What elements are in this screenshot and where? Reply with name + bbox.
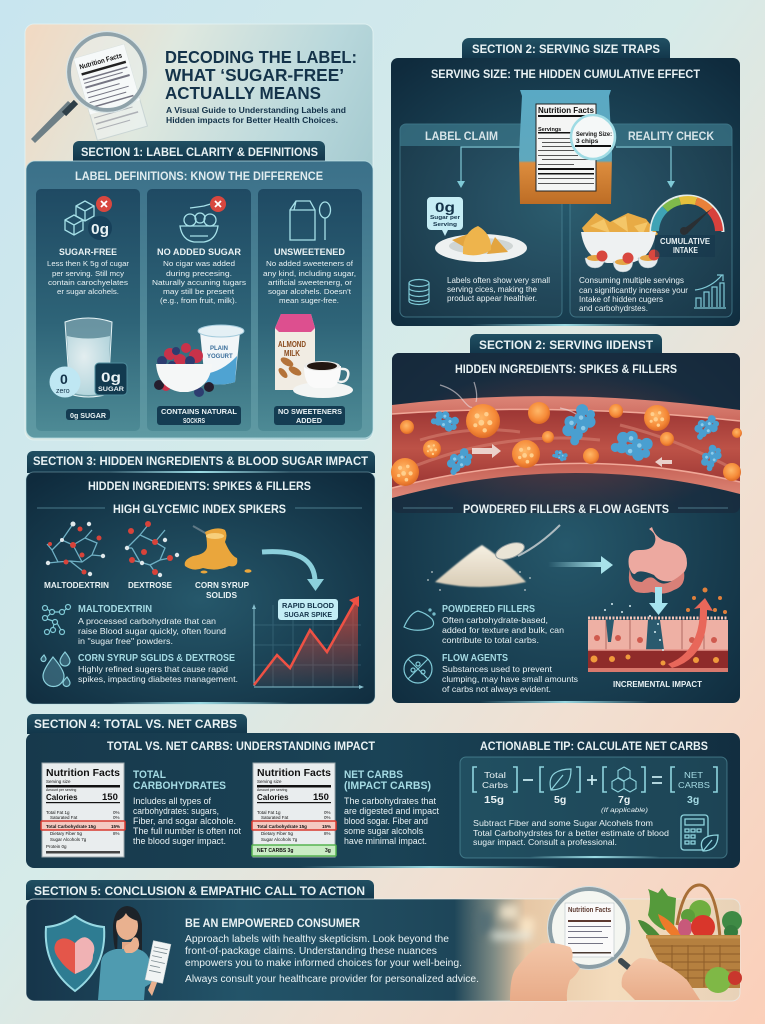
description: mean suger-free. [279, 296, 339, 305]
nutrition label: total carbs: Serving size [46, 779, 71, 784]
description: No added sweeteners of [266, 259, 354, 268]
illustration: glass of water: zero [56, 388, 70, 395]
title [165, 47, 357, 103]
nutrition label: total carbs: 0% [113, 815, 120, 820]
illustration: powder pile and spoon [427, 525, 560, 591]
card: no added sugar [147, 189, 251, 431]
text: corn syrup solids and dextrose: spikes, impacting diabetes management. [78, 675, 238, 684]
nutrition label: total carbs: 15% [111, 824, 120, 829]
nutrition label: net carbs: Saturated Fat [261, 815, 289, 820]
text: total carbohydrates: Fiber, and sogar alcohole. [133, 816, 236, 826]
section 2 tab: serving iidenst [470, 334, 662, 354]
illustration: chip bag with nutrition facts: Servings [538, 127, 561, 133]
text: reality check note: Intake of hidden cugers [579, 295, 663, 304]
icon: molecule network [42, 604, 70, 634]
nutrition label: net carbs: NET CARBS 3g [257, 848, 293, 854]
text: flow agents: Substances used to prevent [442, 665, 553, 674]
nutrition label: net carbs: Nutrition Facts [257, 768, 331, 779]
nutrition label: total carbs: Nutrition Facts [46, 768, 120, 779]
section 4 tab [27, 714, 247, 734]
text: label claim note: product appear healthier. [447, 294, 537, 303]
heading: SERVING SIZE: THE HIDDEN CUMULATIVE EFFECT [431, 67, 701, 81]
icon: rising bars [694, 275, 726, 308]
text: powdered fillers: added for texture and bulk, can [442, 626, 564, 635]
title: ACTUALLY MEANS [165, 83, 321, 103]
illustration: hands with magnifier on label: Nutrition Facts [568, 907, 611, 914]
formula: net carbs: CARBS [678, 780, 710, 790]
icon: shield with heart and brain [46, 916, 104, 991]
tag: 0g sugar: 0g SUGAR [70, 411, 107, 420]
text: powdered fillers: Often carbohydrate-based, [442, 616, 548, 625]
heading: HIDDEN INGREDIENTS: SPIKES & FILLERS [88, 480, 311, 493]
text: flow agents [442, 653, 578, 694]
icon: calculator and leaf [681, 815, 718, 851]
heading: BE AN EMPOWERED CONSUMER [185, 917, 361, 930]
panel: hero header [25, 24, 373, 440]
text: net carbs: blood sogar. Fiber and [344, 816, 428, 826]
title: WHAT ‘SUGAR-FREE’ [165, 65, 344, 85]
nutrition label: total carbs: 8% [113, 831, 120, 836]
section 3 tab: SECTION 3: HIDDEN INGREDIENTS & BLOOD SUGAR IMPACT [33, 456, 368, 468]
icon: no flow agents [404, 655, 432, 683]
formula: sugar alcohol cubes: (If applicable) [601, 807, 648, 814]
nutrition label: total carbs: Protein 0g [46, 844, 67, 849]
nutrition label: net carbs: Total Carbohydrate 15g [257, 824, 307, 829]
nutrition label: net carbs: 3g [325, 848, 331, 854]
text: label claim note: Labels often show very small [447, 276, 550, 285]
text: reality check note: Consuming multiple servings [579, 276, 684, 285]
nutrition label: total carbs [41, 763, 125, 857]
text: net carbs: (IMPACT CARBS) [344, 780, 431, 792]
illustration: chip bag with nutrition facts: Nutrition Facts [538, 106, 595, 115]
panel: total vs net carbs [26, 733, 740, 868]
column: reality check [570, 124, 732, 317]
text: flow agents: clumping, may have small amounts [442, 675, 578, 684]
illustration: berries and plain yogurt: YOGURT [207, 354, 233, 360]
card: sugar-free [36, 189, 140, 431]
tag: contains natural sugars [157, 406, 241, 425]
section 2 tab: serving iidenst: SECTION 2: SERVING IIDENST [479, 338, 654, 352]
column: label claim [400, 124, 562, 317]
section 4 tab: SECTION 4: TOTAL VS. NET CARBS [34, 717, 237, 731]
callout: spike label: SUGAR SPIKE [284, 610, 332, 619]
text: flow agents: of carbs not always evident. [442, 685, 551, 694]
illustration: intestinal lining [588, 588, 728, 672]
icon: bowl with fruit [180, 196, 226, 242]
description: may still be present [163, 287, 235, 296]
nutrition label: net carbs [252, 763, 336, 857]
arrow: powder to gut [548, 556, 613, 574]
illustration: corn syrup [185, 526, 252, 574]
tag: no sweeteners added: NO SWEETENERS [278, 407, 342, 416]
nutrition label: net carbs: Dietary Fiber 5g [261, 831, 294, 836]
formula: sugar alcohol cubes: 7g [618, 794, 630, 806]
nutrition label: net carbs: Calories [257, 793, 289, 802]
description: contain carochyelates [48, 278, 128, 287]
operator: equals [652, 777, 662, 783]
description [47, 259, 129, 296]
nutrition label: total carbs: Calories [46, 793, 78, 802]
nutrition label: net carbs: 8% [324, 831, 331, 836]
text: powdered fillers [442, 604, 564, 645]
nutrition label: total carbs: Saturated Fat [50, 815, 78, 820]
labels: ingredient names [44, 581, 250, 600]
illustration: 0g bubble with plate of chips [427, 197, 527, 262]
text: total carbohydrates [133, 769, 241, 846]
section 1 tab: SECTION 1: LABEL CLARITY & DEFINITIONS [81, 145, 318, 159]
formula: total carbs: Carbs [482, 780, 508, 790]
tag: no sweeteners added [274, 406, 345, 425]
nutrition label: net carbs: Total Fat 1g [257, 810, 281, 815]
illustration: almond milk and coffee: ALMOND [278, 340, 306, 349]
icon: sugar cubes with 0g [65, 196, 112, 240]
description: per serving. Still mcy [52, 269, 124, 278]
caption: incremental impact: INCREMENTAL IMPACT [613, 680, 702, 689]
icon: magnifier over nutrition label [31, 32, 148, 143]
nutrition label: net carbs: 0% [324, 810, 331, 815]
icon: carton and spoon [290, 201, 330, 240]
illustration: chip bag with nutrition facts: 3 chips [576, 138, 599, 145]
text: reality check note: and carbohydrstes. [579, 304, 648, 313]
operator: minus [523, 779, 533, 781]
heading: LABEL DEFINITIONS: KNOW THE DIFFERENCE [75, 169, 323, 183]
illustration: dextrose molecule [125, 521, 179, 577]
nutrition label: total carbs: Total Carbohydrate 15g [46, 824, 96, 829]
description: (e.g., from fruit, milk). [160, 296, 237, 305]
text: total carbohydrates: CARBOHYDRATES [133, 780, 226, 792]
tag: contains natural sugars: CONTAINS NATURAL [161, 407, 237, 416]
text: formula explanation: Subtract Fiber and some Sugar Alcohels from [473, 818, 653, 828]
text: net carbs: are digested and impact [344, 806, 439, 816]
text: reality check note: can significantly increase your [579, 286, 688, 295]
text: total carbohydrates: the blood suger impact. [133, 836, 226, 846]
card: sugar-free: SUGAR-FREE [59, 247, 117, 258]
card: unsweetened [258, 189, 362, 431]
labels: ingredient names: DEXTROSE [128, 581, 173, 590]
text: maltodextrin: in "sugar free" powders. [78, 637, 173, 646]
column: label claim: LABEL CLAIM [425, 131, 498, 143]
nutrition label: net carbs: Amount per serving [257, 788, 287, 792]
description: er sugar alcohels. [57, 287, 119, 296]
callout: spike label: RAPID BLOOD [282, 601, 335, 610]
illustration: 0g bubble with plate of chips: 0g [435, 199, 455, 215]
section 3 tab [27, 451, 375, 473]
text: maltodextrin [78, 604, 226, 646]
text: conclusion body: Always consult your healthcare provider for personalized advice. [185, 974, 479, 985]
illustration: bowl of chips with small bowls [581, 213, 660, 272]
panel: conclusion [26, 885, 742, 1001]
nutrition label: net carbs: Serving size [257, 779, 282, 784]
icon: magnifier over nutrition label: Nutrition Facts [79, 52, 123, 71]
illustration: hands with magnifier on label [510, 886, 700, 1001]
panel: label definitions [26, 161, 373, 438]
illustration: 0g bubble with plate of chips: Sugar per [430, 215, 461, 221]
formula: sugar alcohol cubes [601, 767, 648, 814]
labels: ingredient names: MALTODEXTRIN [44, 581, 109, 590]
nutrition label: net carbs: 150 [313, 792, 329, 803]
section 5 tab: SECTION 5: CONCLUSION & EMPATHIC CALL TO ACTION [34, 884, 365, 898]
text: total carbohydrates: carbohydrates: sugars, [133, 806, 219, 816]
arrow [616, 147, 671, 184]
text: corn syrup solids and dextrose: Highly refined sugers that cause rapid [78, 665, 228, 674]
description: any kind, including sugar, [263, 269, 356, 278]
text: maltodextrin: raise Blood sugar quickly, often found [78, 627, 226, 636]
illustration: berries and plain yogurt [154, 325, 244, 397]
description: No cigar was added [163, 259, 235, 268]
subtitle: Hidden impacts for Better Health Choices. [166, 115, 338, 125]
arrow [461, 147, 525, 184]
formula: net carbs [671, 767, 717, 806]
illustration: chip bag with nutrition facts [519, 90, 615, 204]
text: net carbs: have minimal impact. [344, 836, 427, 846]
text: flow agents: FLOW AGENTS [442, 653, 508, 664]
text: total carbohydrates: TOTAL [133, 769, 166, 781]
nutrition label: total carbs: Total Fat 1g [46, 810, 70, 815]
illustration: berries and plain yogurt: PLAIN [210, 346, 228, 352]
text: corn syrup solids and dextrose: CORN SYRUP SGLIDS & DEXTROSE [78, 653, 235, 664]
panel: hidden ingredients [391, 353, 742, 703]
illustration: glass of water: SUGAR [98, 386, 124, 393]
text: corn syrup solids and dextrose [78, 653, 238, 684]
formula: total carbs: 15g [484, 794, 504, 806]
gauge: cumulative intake [651, 196, 723, 257]
subtitle: A Visual Guide to Understanding Labels and [166, 105, 346, 115]
text: formula explanation: Total Carbohydrstes for a better estimate of blood [473, 828, 669, 838]
nutrition label: total carbs: 150 [102, 792, 118, 803]
labels: ingredient names: SOLIDS [206, 591, 238, 600]
arrow: to chart [262, 552, 324, 591]
panel: net carb formula [460, 757, 727, 858]
section 1 tab [73, 141, 325, 161]
tag: no sweeteners added: ADDED [296, 416, 323, 425]
icon: powder heap [404, 609, 435, 630]
labels: ingredient names: CORN SYRUP [195, 581, 250, 590]
text: label claim note: serving cices, making the [447, 285, 537, 294]
text: formula explanation: sugar impact. Consult a professional. [473, 837, 617, 847]
formula: fiber leaf [540, 767, 580, 806]
icon: sugar cubes with 0g: 0g [91, 221, 109, 238]
card: no added sugar: NO ADDED SUGAR [157, 247, 241, 258]
text: net carbs: NET CARBS [344, 769, 403, 781]
illustration: maltodextrin molecule [46, 522, 105, 576]
panel: blood sugar impact [26, 471, 375, 704]
illustration: 0g bubble with plate of chips: Serving [433, 222, 457, 228]
text: maltodextrin: A processed carbohydrate that can [78, 617, 216, 626]
nutrition label: total carbs: Sugar Alcohols 7g [50, 837, 87, 842]
formula: total carbs [473, 767, 517, 806]
gauge: cumulative intake: CUMULATIVE [660, 237, 711, 246]
nutrition label: total carbs: Dietary Fiber 5g [50, 831, 83, 836]
nutrition label: net carbs: Sugar Alcohols 7g [261, 837, 298, 842]
text: conclusion body [185, 934, 479, 985]
illustration: blood vessel [391, 382, 742, 498]
illustration: glass of water: 0 [60, 371, 68, 387]
heading: actionable tip: ACTIONABLE TIP: CALCULATE NET CARBS [480, 739, 708, 753]
description: sogar alcohels. Doesn’t [268, 287, 352, 296]
subtitle [166, 105, 346, 125]
operator: plus [587, 775, 597, 785]
text: maltodextrin: MALTODEXTRIN [78, 604, 152, 615]
text: conclusion body: Approach labels with healthy skepticism. Look beyond the [185, 934, 449, 945]
column: reality check: REALITY CHECK [628, 131, 715, 143]
title: DECODING THE LABEL: [165, 47, 357, 67]
icon: drops [41, 652, 70, 687]
illustration: basket of vegetables [638, 885, 742, 993]
formula: net carbs: NET [684, 770, 703, 780]
illustration: glass of water [50, 318, 127, 398]
gauge: cumulative intake: INTAKE [673, 246, 699, 255]
text: powdered fillers: contribute to total carbs. [442, 636, 539, 645]
text: conclusion body: empowers you to make informed choices for your well-being. [185, 958, 462, 969]
description [263, 259, 356, 305]
illustration: almond milk and coffee: MILK [284, 349, 300, 358]
heading: HIDDEN INGREDIENTS: SPIKES & FILLERS [455, 363, 677, 376]
text: formula explanation [473, 818, 669, 847]
heading: TOTAL VS. NET CARBS: UNDERSTANDING IMPACT [107, 739, 376, 753]
description: Less then K 5g of cugar [47, 259, 129, 268]
subheading: HIGH GLYCEMIC INDEX SPIKERS [113, 503, 286, 516]
card: unsweetened: UNSWEETENED [274, 247, 345, 258]
text: conclusion body: front-of-package claims. Understanding these nuances [185, 946, 437, 957]
callout: spike label [278, 599, 338, 620]
text: reality check note [579, 276, 688, 313]
illustration: stomach and intestine [628, 527, 687, 594]
panel: serving size [391, 58, 740, 326]
description [152, 259, 246, 305]
nutrition label: total carbs: Amount per serving [46, 788, 76, 792]
arrow: down to gut lining [649, 587, 668, 615]
text: powdered fillers: POWDERED FILLERS [442, 604, 535, 615]
description: artificial sweetenerg, or [268, 278, 352, 287]
text: net carbs: some sugar alcohols [344, 826, 423, 836]
text: total carbohydrates: The full number is often not [133, 826, 241, 836]
text: net carbs [344, 769, 439, 846]
illustration: glass of water: 0g [101, 369, 121, 385]
formula: net carbs: 3g [687, 794, 699, 806]
description: during precesing. [166, 269, 232, 278]
nutrition label: net carbs: 0% [324, 815, 331, 820]
formula: total carbs: Total [484, 770, 506, 780]
nutrition label: net carbs: 15% [322, 824, 331, 829]
text: net carbs: The carbohydrates that [344, 796, 436, 806]
section 5 tab [26, 880, 374, 900]
illustration: thinking woman [98, 906, 171, 1000]
section 2 tab: serving size traps: SECTION 2: SERVING SIZE TRAPS [472, 42, 660, 56]
illustration: almond milk and coffee [275, 314, 353, 398]
text: label claim note [409, 276, 550, 305]
description: Naturally accuning tugars [152, 278, 246, 287]
illustration: chip bag with nutrition facts: Serving Size: [576, 131, 612, 138]
chart: rapid blood sugar spike [252, 596, 364, 689]
nutrition label: total carbs: 0% [113, 810, 120, 815]
tag: contains natural sugars: SOCKRS [183, 416, 205, 425]
formula: fiber leaf: 5g [554, 794, 566, 806]
text: total carbohydrates: Includes all types of [133, 796, 211, 806]
arrowheads [457, 181, 675, 188]
heading: powdered fillers and flow agents: POWDERED FILLERS & FLOW AGENTS [463, 503, 669, 516]
section 2 tab: serving size traps [462, 38, 670, 59]
